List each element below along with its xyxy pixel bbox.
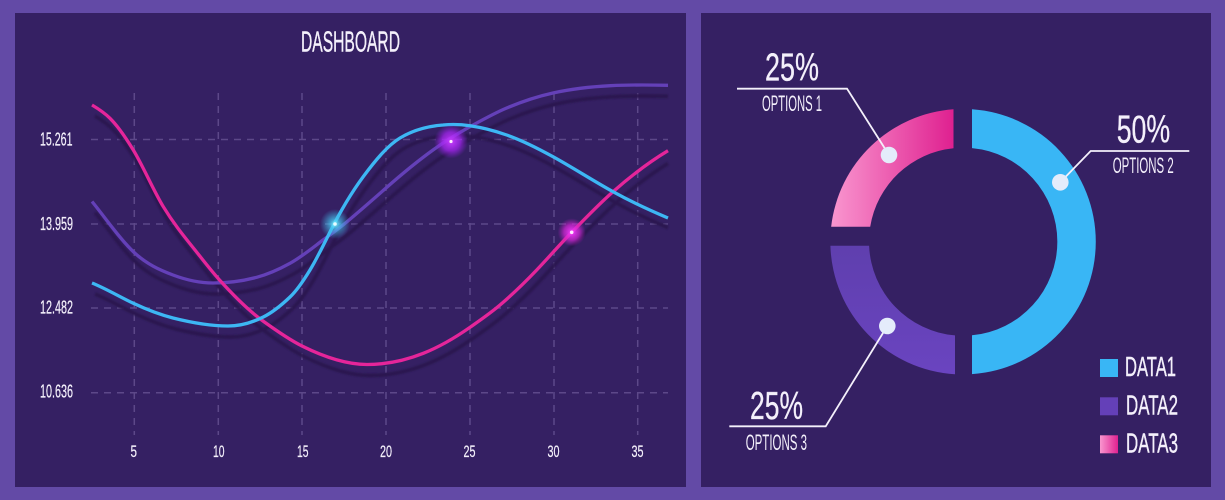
line: purple series — [92, 85, 668, 283]
donut segment: data1 blue 50% — [972, 109, 1096, 374]
y axis labels: 12.482 — [40, 298, 73, 318]
callout: options 3 — [729, 318, 896, 455]
x axis labels: 5 — [130, 443, 137, 461]
line: pink series — [92, 105, 668, 364]
panel: dashboard line chart — [15, 13, 686, 487]
glow marker: magenta — [558, 218, 586, 246]
line: blue series — [92, 124, 668, 326]
legend item: data2: DATA2 — [1126, 390, 1178, 420]
y axis labels: 10.636 — [40, 382, 73, 402]
panel: donut chart — [701, 13, 1211, 487]
legend item: data3: DATA3 — [1126, 428, 1178, 459]
x axis labels: 15 — [297, 443, 308, 461]
legend item: data1: DATA1 — [1125, 351, 1176, 382]
donut segment: data3 pink 25% — [831, 109, 954, 227]
x axis labels: 25 — [464, 443, 476, 461]
y axis labels — [40, 130, 73, 402]
callout: options 2: 50% — [1117, 108, 1170, 151]
callout: options 3: 25% — [750, 385, 803, 428]
y axis labels: 13.959 — [40, 214, 73, 234]
callout: options 1 — [737, 46, 897, 163]
x axis labels: 35 — [632, 443, 644, 461]
heading: dashboard: DASHBOARD — [301, 26, 400, 58]
glow marker: violet — [434, 124, 468, 158]
donut segment: data2 purple 25% — [830, 246, 955, 374]
legend — [1100, 351, 1178, 459]
y axis labels: 15.261 — [40, 130, 72, 150]
callout: options 3: OPTIONS 3 — [746, 430, 807, 455]
x axis labels — [130, 443, 644, 461]
callout: options 1: OPTIONS 1 — [762, 91, 822, 116]
glow marker: cyan — [320, 209, 350, 239]
x axis labels: 10 — [213, 443, 224, 461]
callout: options 2 — [1052, 108, 1189, 191]
x axis labels: 30 — [548, 443, 560, 461]
callout: options 1: 25% — [765, 46, 819, 90]
x axis labels: 20 — [380, 443, 392, 461]
